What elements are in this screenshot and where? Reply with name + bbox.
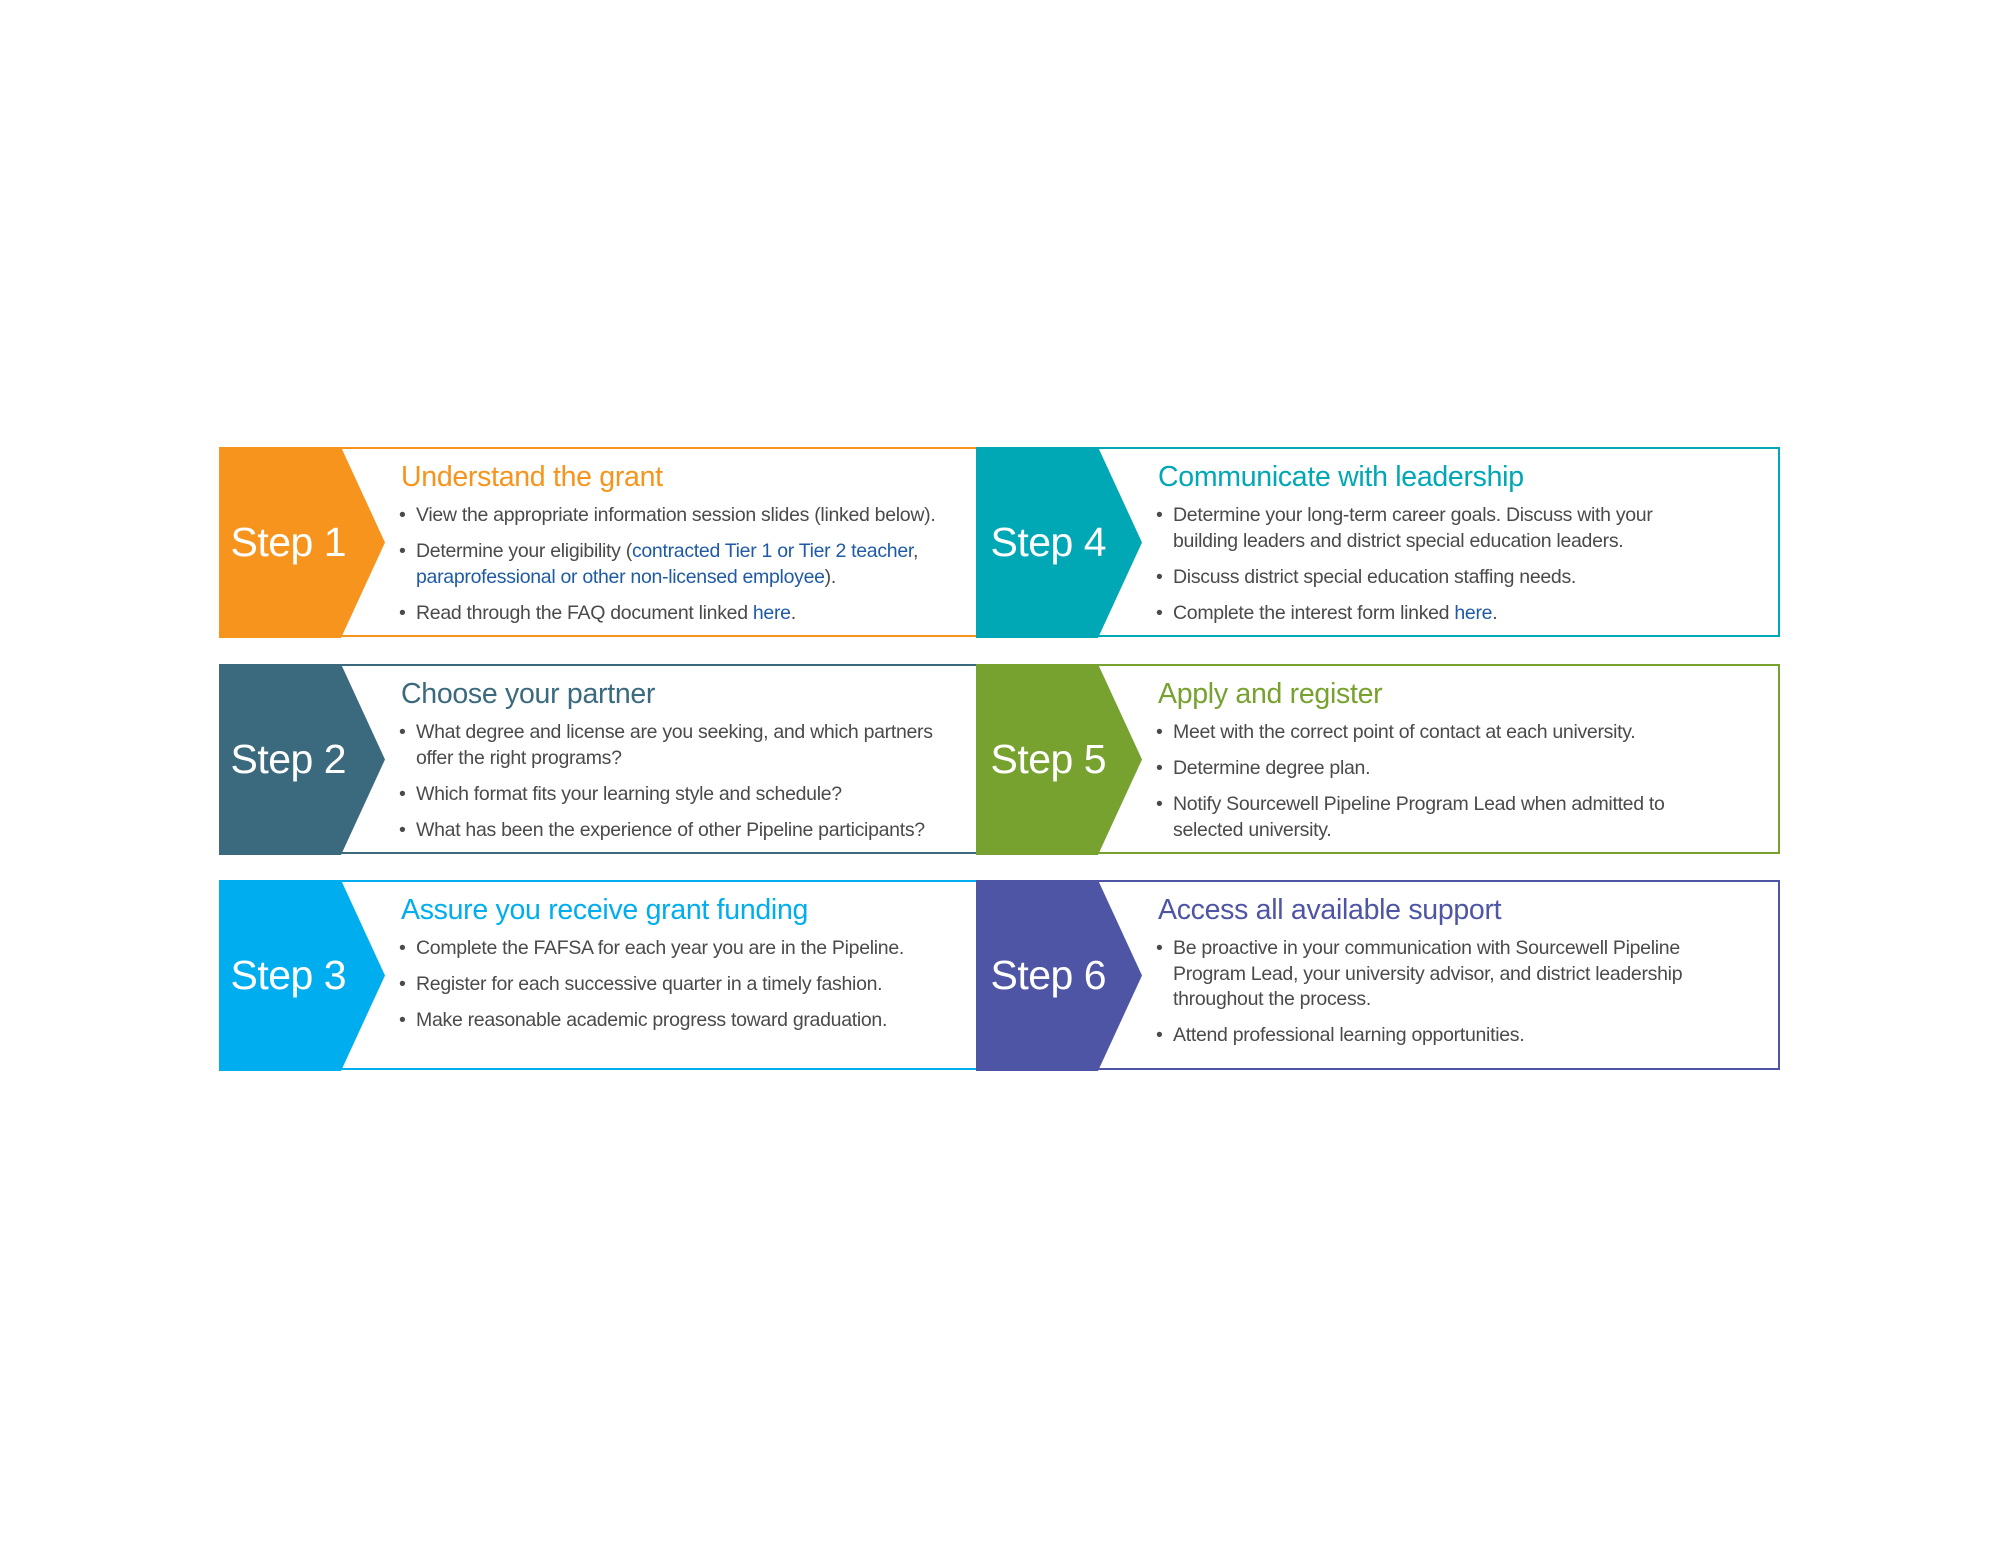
heading: apply and register: Apply and register [1158,678,1382,710]
chevron: step 1 [219,449,385,638]
chevron: step 2: Step 2 [230,736,346,782]
panel: step 2 [219,664,978,854]
bullets: step 1: Determine your eligibility (contracted Tier 1 or Tier 2 teacher, [416,540,918,562]
panel: step 4 [976,447,1780,637]
bullets: step 4: Complete the interest form linked here. [1173,602,1497,624]
bullets: step 3: Make reasonable academic progress toward graduation. [416,1009,887,1031]
chevron: step 3: Step 3 [230,952,346,998]
bullets: step 5: Meet with the correct point of contact at each university. [1173,721,1635,743]
bullets: step 5: Notify Sourcewell Pipeline Program Lead when admitted to [1173,793,1665,815]
bullets: step 6 [1156,937,1682,1046]
bullets: step 2: offer the right programs? [416,746,622,768]
panel: step 3 [219,880,978,1070]
bullets: step 4: Discuss district special education staffing needs. [1173,566,1576,588]
bullets: step 1: Read through the FAQ document linked here. [416,602,796,624]
chevron: step 1: Step 1 [230,518,346,564]
bullets: step 2: Which format fits your learning style and schedule? [416,782,842,804]
bullets: step 4 [1156,504,1653,624]
chevron: step 2 [219,666,385,855]
bullets: step 6: throughout the process. [1173,988,1371,1010]
heading: choose your partner: Choose your partner [401,678,655,710]
bullets: step 5 [1156,721,1665,840]
bullets: step 3: Register for each successive quarter in a timely fashion. [416,973,882,995]
chevron: step 3 [219,882,385,1071]
bullets: step 2: What degree and license are you seeking, and which partners [416,721,933,743]
bullets: step 3 [400,937,904,1031]
bullets: step 2: What has been the experience of other Pipeline participants? [416,818,925,840]
bullets: step 5: Determine degree plan. [1173,757,1370,779]
chevron: step 4 [976,449,1142,638]
heading: assure grant funding: Assure you receive grant funding [401,894,808,926]
bullets: step 1 [400,504,935,624]
bullets: step 1: paraprofessional or other non-licensed employee). [416,566,836,588]
chevron: step 6: Step 6 [990,952,1106,998]
panel: step 5 [976,664,1780,854]
heading: communicate with leadership: Communicate with leadership [1158,461,1524,493]
bullets: step 3: Complete the FAFSA for each year you are in the Pipeline. [416,937,904,959]
bullets: step 5: selected university. [1173,818,1331,840]
chevron: step 5 [976,666,1142,855]
bullets: step 4: Determine your long-term career goals. Discuss with your [1173,504,1653,526]
heading: access support: Access all available support [1158,894,1501,926]
chevron: step 6 [976,882,1142,1071]
chevron: step 4: Step 4 [990,518,1106,564]
bullets: step 1: View the appropriate information session slides (linked below). [416,504,935,526]
panel: step 1 [219,447,978,637]
bullets: step 6: Program Lead, your university advisor, and district leadership [1173,962,1682,984]
chevron: step 5: Step 5 [990,736,1106,782]
bullets: step 2 [400,721,933,840]
heading: understand the grant: Understand the grant [401,461,663,493]
bullets: step 4: building leaders and district special education leaders. [1173,530,1623,552]
bullets: step 6: Be proactive in your communication with Sourcewell Pipeline [1173,937,1680,959]
bullets: step 6: Attend professional learning opportunities. [1173,1024,1524,1046]
panel: step 6 [976,880,1780,1070]
